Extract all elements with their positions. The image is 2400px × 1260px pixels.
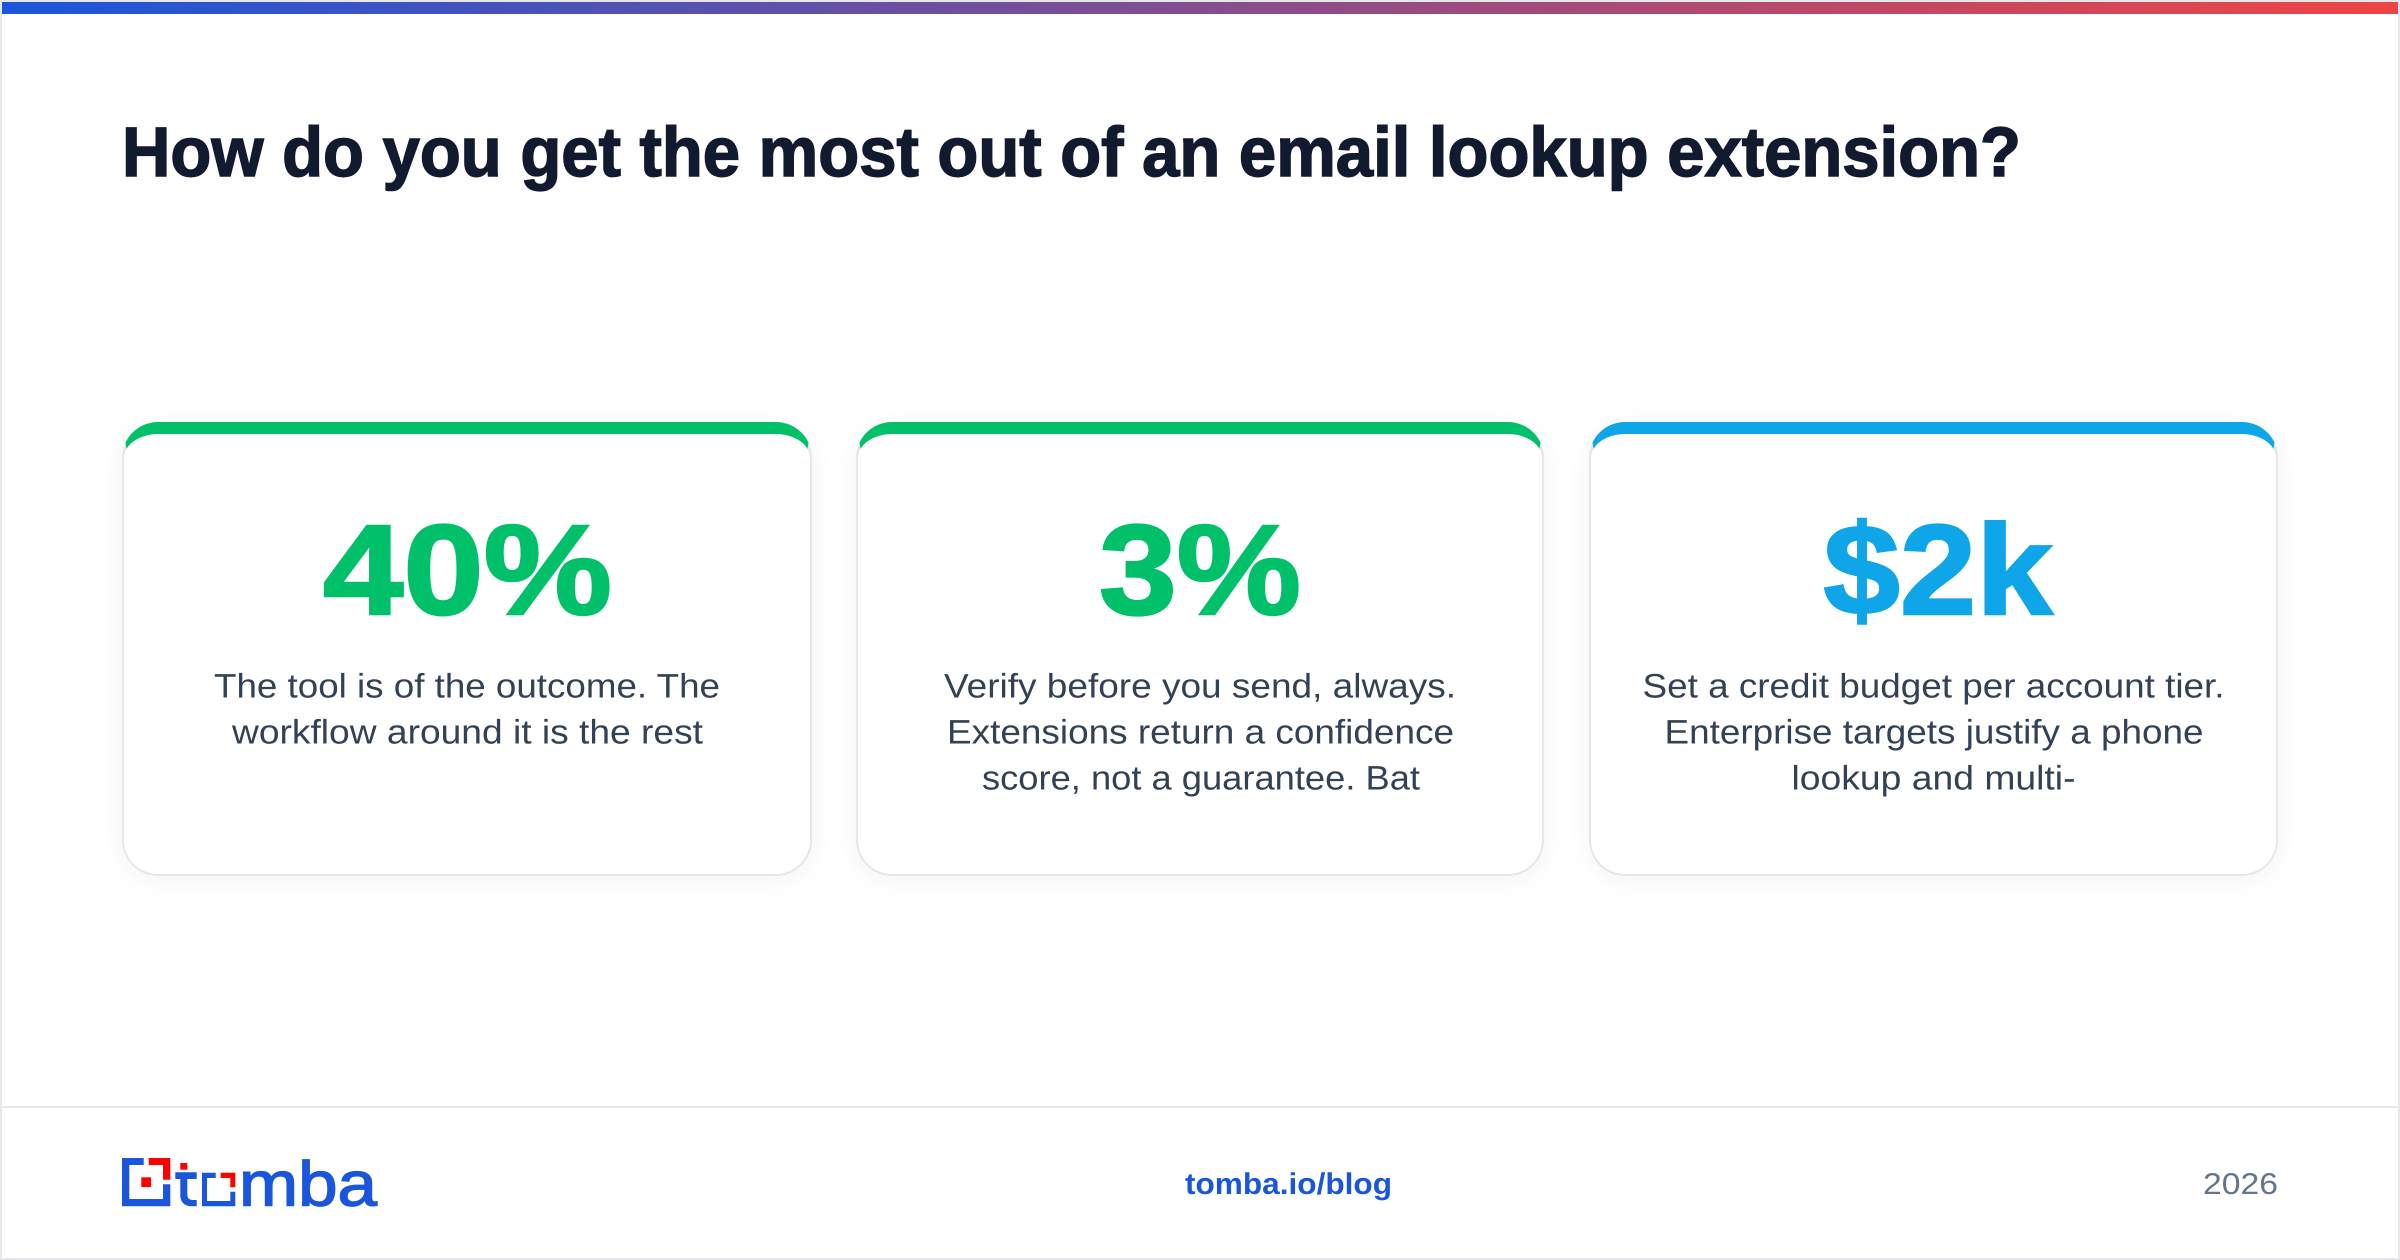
- description: card 3: [1642, 668, 2224, 798]
- description: card 2: [944, 668, 1456, 798]
- stat: $2k: $2k: [1823, 499, 2053, 642]
- panel: card 3%: [856, 422, 1544, 876]
- footer divider: [2, 1106, 2398, 1108]
- logo icon: square bracket mark: [122, 1158, 170, 1206]
- description: card 3: lookup and multi-: [1791, 760, 2075, 798]
- logo wordmark: mba: mba: [239, 1150, 378, 1220]
- footer link: tomba.io/blog: [1185, 1168, 1392, 1201]
- description: card 3: Enterprise targets justify a phone: [1664, 714, 2203, 752]
- panel: card 40%: [122, 422, 812, 876]
- top gradient bar: [2, 2, 2398, 14]
- logo letter mark: t: [175, 1163, 197, 1206]
- logo: tomba: [122, 1150, 378, 1220]
- description: card 2: score, not a guarantee. Bat: [982, 760, 1421, 798]
- stat: 3%: 3%: [1099, 499, 1301, 642]
- panel: card $2k: [1588, 422, 2278, 876]
- logo letter mark: o: [202, 1173, 235, 1206]
- title: How do you get the most out of an email lookup extension?: [122, 113, 2021, 191]
- description: card 2: Extensions return a confidence: [947, 714, 1454, 752]
- stat: 40%: 40%: [323, 499, 612, 642]
- description: card 2: Verify before you send, always.: [944, 668, 1456, 706]
- description: card 3: Set a credit budget per account tier.: [1642, 668, 2224, 706]
- footer year: 2026: [2203, 1168, 2278, 1201]
- description: card 1: [214, 668, 720, 752]
- description: card 1: The tool is of the outcome. The: [214, 668, 720, 706]
- description: card 1: workflow around it is the rest: [231, 714, 704, 752]
